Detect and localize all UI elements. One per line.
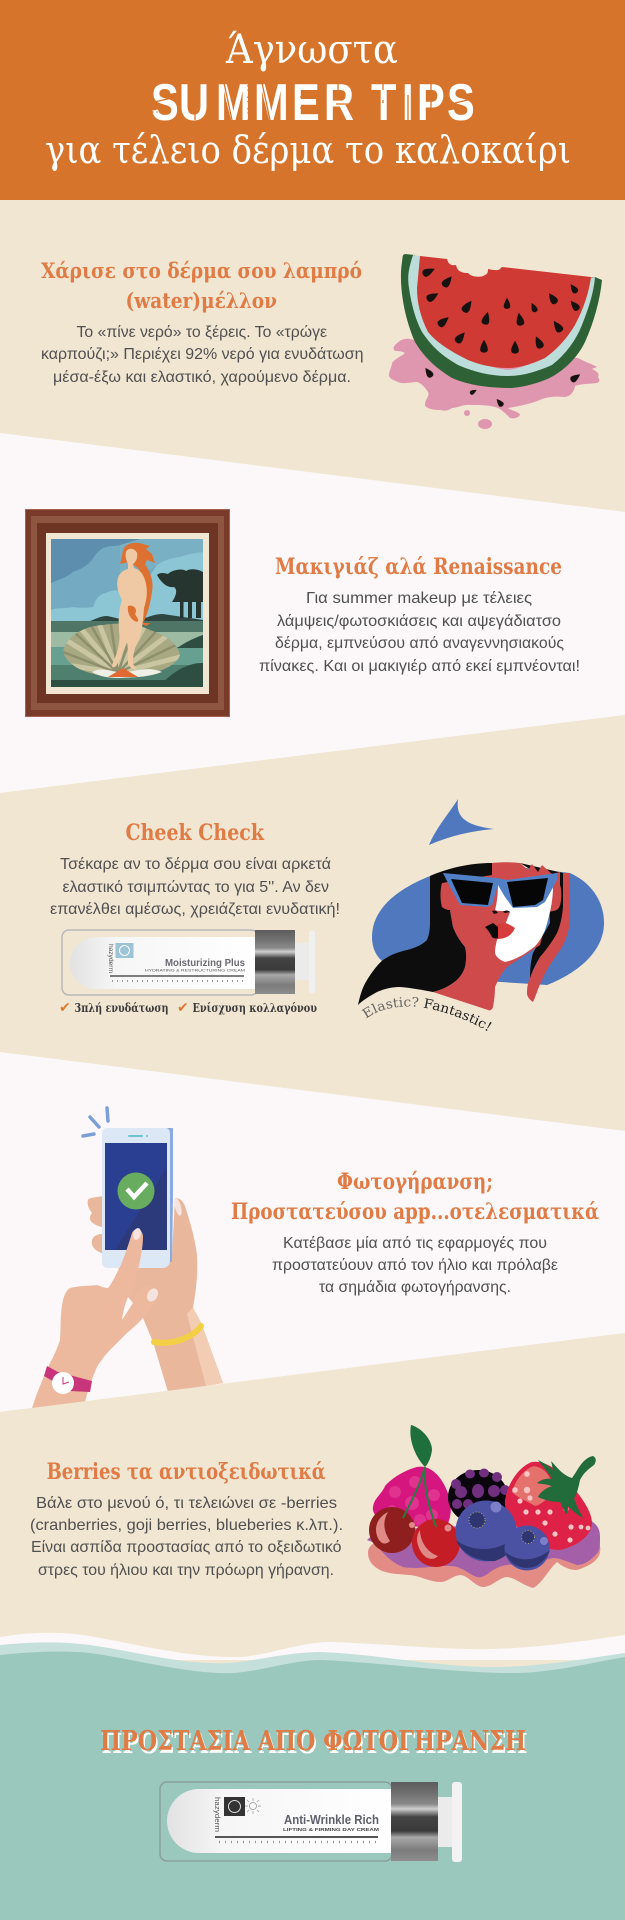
icon: framed painting [25,509,230,717]
product: anti-wrinkle rich tube [160,1782,462,1862]
heading: photoaging: Φωτογήρανση; [337,1169,493,1195]
text block: renaissance [259,590,580,675]
text block: berries: Βάλε στο μενού ό, τι τελειώνει σε -berries [36,1495,337,1512]
product: anti-wrinkle rich tube: hazyderm [213,1797,222,1832]
benefits checklist: ✔ [59,1000,71,1016]
title line 2: SUMMER TIPS [151,73,475,131]
text block: renaissance: δέρμα, εμπνεύσου από αναγεννησιακούς [275,635,564,652]
panel: cheek check tip [1,715,624,1031]
curved caption: Elastic? Fantastic! [362,996,492,1031]
title line 3: για τέλειο δέρμα το καλοκαίρι [45,128,571,172]
benefits checklist: Ενίσχυση κολλαγόνου [192,1001,317,1015]
benefits checklist: 3πλή ενυδάτωση [74,1001,168,1015]
text block: photoaging: Κατέβασε μία από τις εφαρμογές που [283,1235,547,1252]
icon: hands holding phone [32,1108,223,1408]
product: moisturizing plus tube: HYDRATING & RESTRUCTURING CREAM [145,968,245,972]
icon: watermelon [389,254,602,429]
text block: berries: στρες του ήλιου και την πρόωρη γήρανση. [38,1562,334,1579]
text block: watermelon: Το «πίνε νερό» το ξέρεις. Το «τρώγε [76,324,327,341]
header banner [0,0,625,200]
text block: cheek check [50,856,340,918]
product: anti-wrinkle rich tube: LIFTING & FIRMING DAY CREAM [283,1827,379,1832]
text block: watermelon: καρπούζι;» Περιέχει 92% νερό για ενυδάτωση [41,346,364,363]
text block: watermelon: μέσα-έξω και ελαστικό, χαρούμενο δέρμα. [53,369,351,386]
text block: cheek check: Τσέκαρε αν το δέρμα σου είναι αρκετά [60,856,331,873]
text block: photoaging: τα σημάδια φωτογήρανσης. [319,1279,511,1296]
product: anti-wrinkle rich tube: Anti-Wrinkle Rich [284,1813,379,1827]
text block: berries: Είναι ασπίδα προστασίας από το οξειδωτικό [31,1539,342,1556]
panel: footer product [0,1633,625,1920]
heading: berries: Berries τα αντιοξειδωτικά [47,1459,326,1485]
panel: photoaging app tip [0,1052,625,1412]
text block: renaissance: λάμψεις/φωτοσκιάσεις και αψεγάδιατσο [277,613,561,630]
icon: woman with sunglasses and hat [358,799,604,1010]
heading: photoaging [231,1169,599,1225]
text block: berries: (cranberries, goji berries, blueberies κ.λπ.). [30,1517,343,1534]
text block: renaissance: πίνακες. Και οι μακιγιέρ από εκεί εμπνέονται! [259,658,580,675]
text block: cheek check: επανέλθει αμέσως, χρειάζεται ενυδατική! [50,901,340,918]
product: moisturizing plus tube: hazyderm [107,944,114,973]
text block: watermelon [41,324,364,386]
title line 1: Άγνωστα [225,27,398,73]
heading: watermelon: (water)μέλλον [126,288,277,313]
heading: cheek check: Cheek Check [126,820,265,846]
footer heading: ΠΡΟΣΤΑΣΙΑ ΑΠΟ ΦΩΤΟΓΗΡΑΝΣΗ [102,1729,528,1760]
text block: cheek check: ελαστικό τσιμπώντας το για 5''. Αν δεν [62,879,329,896]
icon: berries [367,1425,600,1588]
heading: watermelon: Χάρισε στο δέρμα σου λαμπρό [41,258,362,283]
heading: renaissance: Μακιγιάζ αλά Renaissance [275,554,562,580]
panel: berries tip [0,1333,625,1660]
panel: renaissance makeup tip [0,433,625,793]
product: moisturizing plus tube [62,930,315,995]
benefits checklist: ✔ [177,1000,189,1016]
footer heading: ΠΡΟΣΤΑΣΙΑ ΑΠΟ ΦΩΤΟΓΗΡΑΝΣΗ [100,1726,526,1757]
text block: photoaging [272,1235,558,1296]
text block: photoaging: προστατεύουν από τον ήλιο και πρόλαβε [272,1257,558,1274]
product: moisturizing plus tube: Moisturizing Plus [165,957,245,969]
text block: berries [30,1495,343,1579]
panel: watermelon tip [0,200,625,512]
heading: watermelon [41,258,362,313]
benefits checklist [59,1000,317,1016]
text block: renaissance: Για summer makeup με τέλειες [306,590,532,607]
